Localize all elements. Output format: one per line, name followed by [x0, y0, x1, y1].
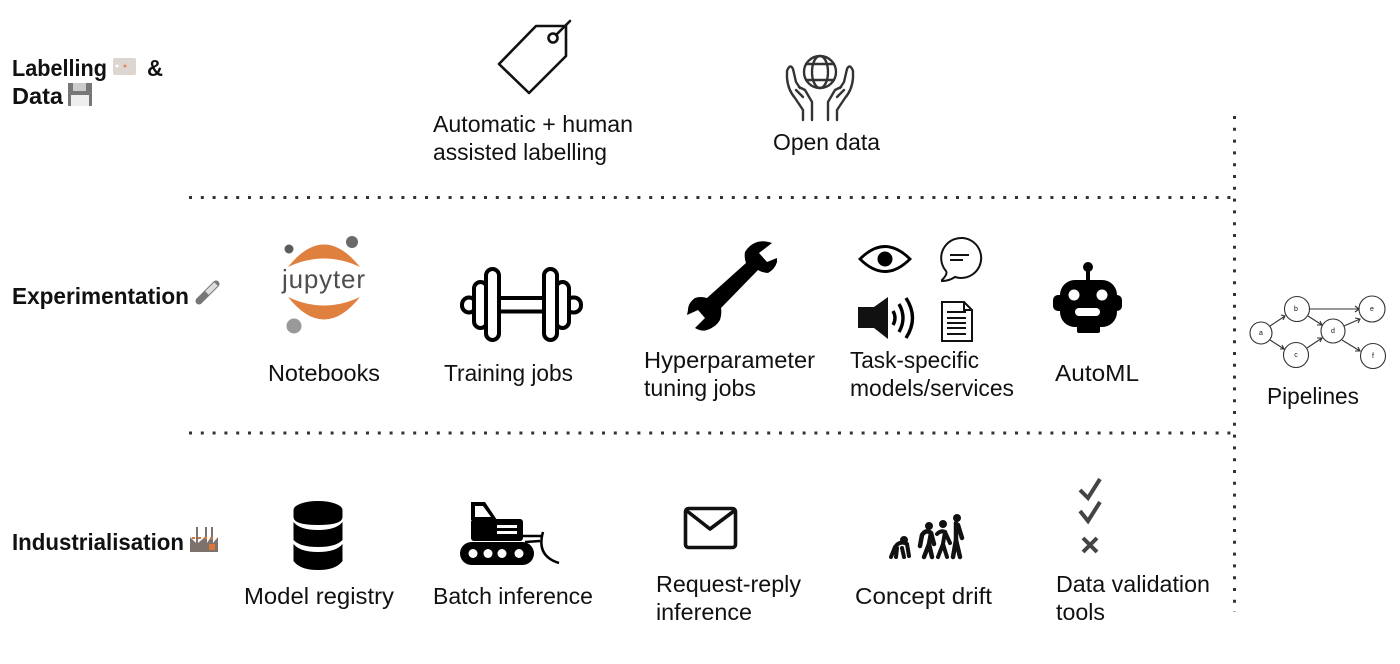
icon: pipeline DAG: f — [1372, 353, 1374, 360]
item: concept drift: Concept drift — [855, 583, 993, 609]
row heading: Labelling & Data — [12, 55, 163, 109]
item: notebooks — [268, 236, 380, 386]
icon: document — [942, 302, 972, 341]
item: automatic + human assisted labelling — [433, 21, 633, 165]
item: model registry: Model registry — [244, 583, 395, 609]
icon: label emoji — [113, 58, 136, 75]
icon: dumbbell — [462, 269, 581, 340]
item: hyperparameter tuning jobs: tuning jobs — [644, 375, 756, 401]
icon: database — [294, 501, 342, 570]
icon: robot — [1053, 262, 1122, 333]
row heading: Experimentation: Experimentation — [12, 283, 189, 309]
item: pipelines — [1250, 296, 1386, 409]
item: automatic + human assisted labelling: assisted labelling — [433, 139, 607, 165]
item: request-reply inference — [656, 508, 801, 625]
icon: factory emoji — [190, 527, 218, 552]
item: data validation tools — [1056, 479, 1210, 625]
icon: pipeline DAG: c — [1294, 352, 1298, 359]
icon: jupyter logo — [281, 236, 365, 334]
row heading: Labelling & Data: Labelling — [12, 55, 107, 81]
item: batch inference — [433, 502, 593, 609]
item: training jobs: Training jobs — [444, 360, 573, 386]
icon: human evolution silhouettes — [891, 514, 962, 557]
item: data validation tools: tools — [1056, 599, 1105, 625]
item: automatic + human assisted labelling: Automatic + human — [433, 111, 633, 137]
item: task-specific models/services: models/services — [850, 375, 1014, 401]
icon: eye — [860, 246, 910, 272]
icon: price tag — [499, 21, 570, 93]
icon: pipeline DAG: e — [1370, 306, 1374, 313]
item: pipelines: Pipelines — [1267, 383, 1359, 409]
icon: pipeline DAG — [1250, 296, 1386, 368]
item: open data — [773, 56, 880, 155]
item: data validation tools: Data validation — [1056, 571, 1210, 597]
item: concept drift — [855, 514, 993, 609]
icon: test tube emoji — [199, 284, 216, 301]
icon: speaker — [858, 297, 912, 339]
icon: envelope — [686, 508, 736, 548]
item: AutoML — [1053, 262, 1139, 386]
icon: jupyter logo: jupyter — [281, 264, 365, 294]
icon: pipeline DAG: b — [1294, 306, 1298, 313]
icon: hands holding globe — [787, 56, 853, 120]
icon: pipeline DAG: a — [1259, 330, 1263, 337]
item: task-specific models/services — [850, 238, 1014, 401]
icon: two checks and a cross — [1080, 479, 1100, 552]
item: open data: Open data — [773, 129, 880, 155]
icon: bulldozer — [460, 502, 559, 565]
item: notebooks: Notebooks — [268, 360, 380, 386]
item: hyperparameter tuning jobs — [644, 241, 815, 401]
row heading: Labelling & Data: & — [147, 55, 163, 81]
icon: speech bubble — [941, 238, 981, 281]
item: batch inference: Batch inference — [433, 583, 593, 609]
icon: pipeline DAG: d — [1331, 328, 1335, 335]
item: model registry — [244, 501, 395, 609]
item: task-specific models/services: Task-specific — [850, 347, 979, 373]
row heading: Industrialisation: Industrialisation — [12, 529, 184, 555]
icon: floppy disk emoji — [68, 83, 92, 106]
item: AutoML: AutoML — [1055, 360, 1139, 386]
row heading: Labelling & Data: Data — [12, 83, 63, 109]
item: training jobs — [444, 269, 581, 386]
item: request-reply inference: inference — [656, 599, 752, 625]
item: hyperparameter tuning jobs: Hyperparameter — [644, 347, 815, 373]
item: request-reply inference: Request-reply — [656, 571, 801, 597]
icon: wrench — [687, 241, 777, 331]
